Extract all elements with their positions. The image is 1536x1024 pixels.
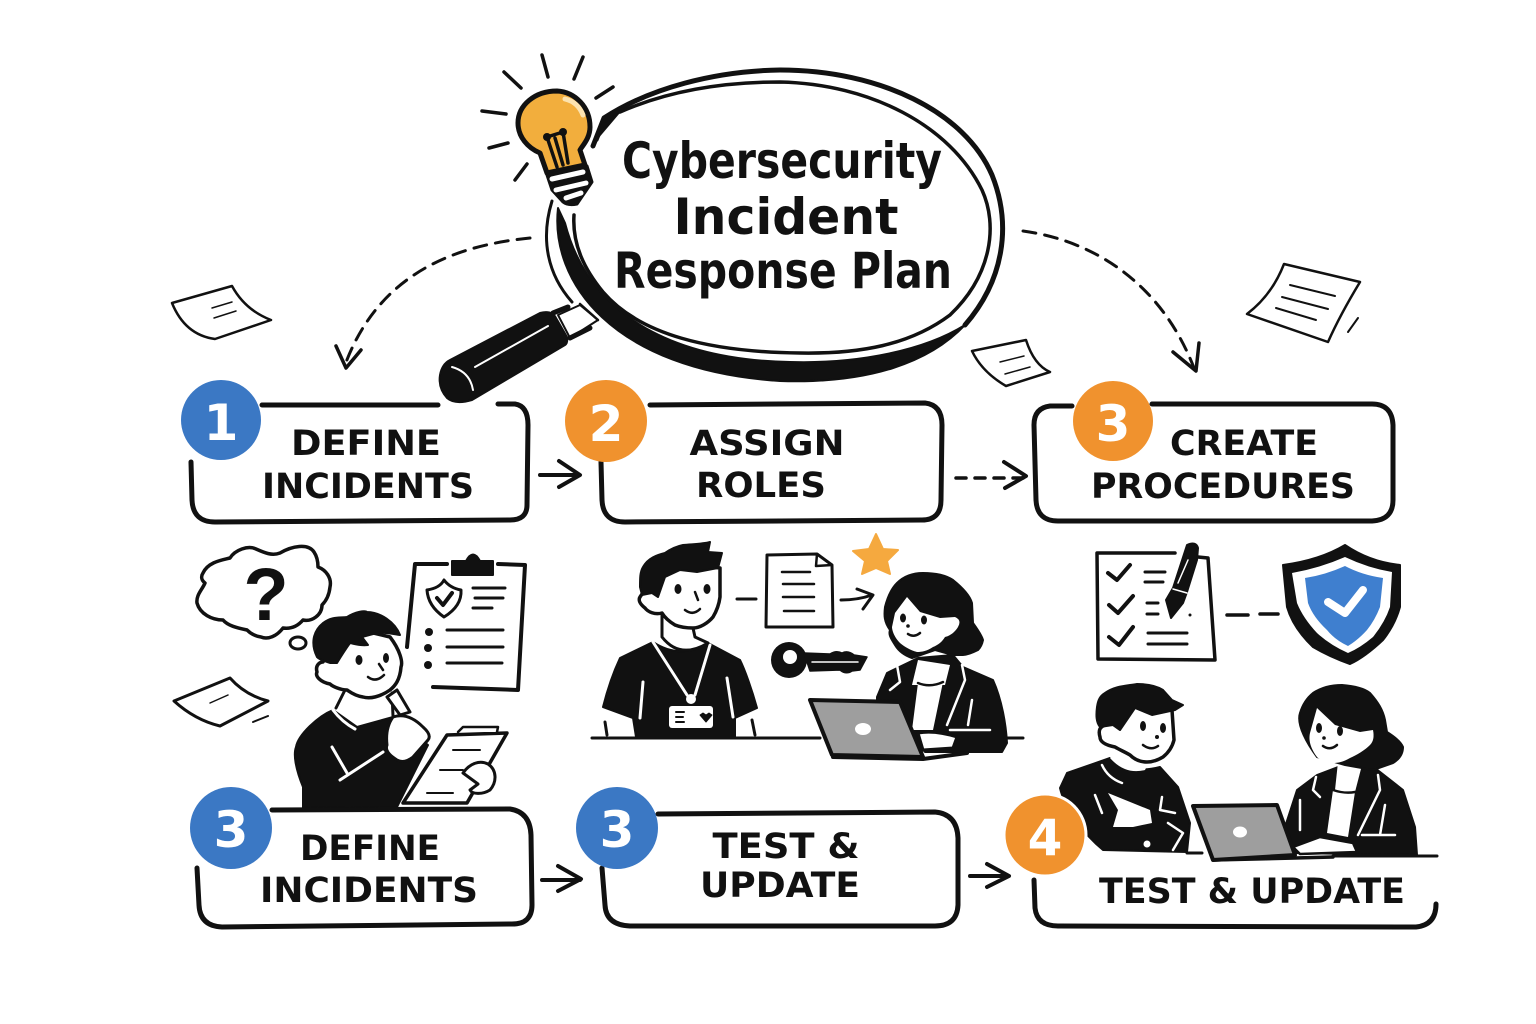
icon: paper top left (172, 286, 271, 339)
person left (1060, 684, 1190, 852)
hand (386, 716, 429, 761)
arrow: 1 to 2 (540, 461, 580, 487)
laptop (810, 700, 923, 757)
icon: light bulb (482, 55, 613, 205)
panel: step 3 create procedures: PROCEDURES (1091, 467, 1355, 507)
panel: step 2 assign roles (565, 380, 942, 522)
icon: paper left (174, 678, 268, 726)
badge 4 (1004, 794, 1086, 876)
panel: test and update (576, 787, 958, 926)
label: CREATE (1170, 424, 1318, 464)
title: Incident (674, 188, 898, 246)
label: ASSIGN (690, 424, 844, 464)
person with badge (603, 542, 757, 737)
icon: shield (1283, 545, 1400, 664)
panel: step 3 define incidents (blue) (190, 787, 532, 927)
handheld clipboard (403, 733, 507, 803)
panel: step 2 assign roles: ROLES (696, 466, 826, 506)
icon: clipboard checklist (407, 554, 525, 690)
icon: magnifier handle (440, 304, 598, 402)
badge 3: 3 (1096, 395, 1130, 453)
icon: thought bubble: ? (243, 553, 289, 636)
magnifying glass with title (440, 70, 1003, 402)
panel: test and update step 4 (1004, 794, 1436, 927)
panel: test and update: UPDATE (700, 866, 860, 906)
badge 1 (181, 380, 261, 460)
badge 1: 1 (204, 394, 238, 452)
label: TEST & UPDATE (1099, 872, 1405, 912)
illustration: assign roles (592, 534, 1023, 759)
icon: star (853, 534, 898, 574)
panel: step 3 create procedures (1034, 381, 1393, 521)
person (295, 611, 507, 808)
icon: document (766, 554, 833, 627)
arrow: title to step 3 (1023, 231, 1199, 371)
badge: 3 (600, 801, 634, 859)
panel: step 3 define incidents (blue): INCIDENTS (260, 871, 478, 911)
laptop (1193, 805, 1333, 860)
label: TEST & (712, 827, 860, 867)
badge 4: 4 (1028, 809, 1062, 867)
person right (1285, 685, 1417, 855)
title (614, 132, 952, 300)
icon: checklist with pen (1097, 544, 1215, 660)
badge (190, 787, 272, 869)
icon: thought bubble (197, 546, 330, 649)
pencil (387, 690, 410, 715)
badge 3 (1073, 381, 1153, 461)
badge: 3 (214, 801, 248, 859)
icon: paper top right (1247, 264, 1360, 342)
panel: step 1 define incidents (181, 380, 528, 522)
illustration: thinking person with clipboard (197, 546, 525, 808)
person with laptop (810, 573, 1007, 759)
label: DEFINE (291, 424, 441, 464)
arrow: document to person (841, 589, 873, 609)
id badge (686, 694, 696, 704)
title: Response Plan (614, 242, 952, 300)
label: DEFINE (300, 829, 440, 869)
badge (576, 787, 658, 869)
arrow: title to step 1 (336, 238, 530, 368)
arrow: to step 4 (970, 864, 1009, 887)
icon: paper middle (972, 340, 1050, 386)
title: Cybersecurity (622, 132, 942, 190)
arrow: to test and update (542, 866, 581, 891)
badge 2 (565, 380, 647, 462)
badge 2: 2 (589, 395, 623, 453)
magnifier lens (546, 70, 1003, 381)
arrow: 2 to 3 (956, 462, 1026, 488)
panel: step 1 define incidents: INCIDENTS (262, 467, 474, 507)
icon: key (771, 642, 867, 678)
illustration: checklist and shield (1060, 544, 1437, 860)
